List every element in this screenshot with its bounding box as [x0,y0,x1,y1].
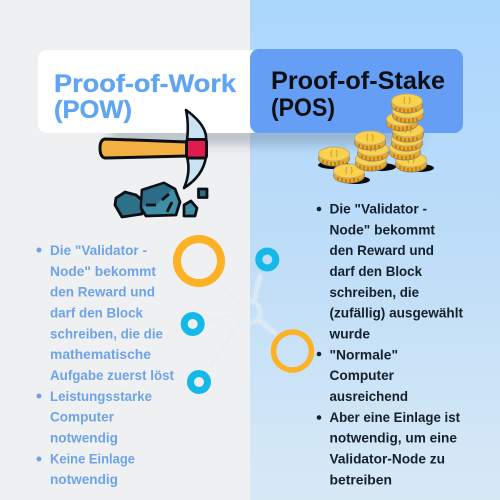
text block: Proof-of-Stake bullets: darf den Block [330,263,422,279]
title: Proof-of-Stake: Proof-of-Stake [271,67,445,95]
text block: Proof-of-Work bullets: den Reward und [50,284,155,300]
text block: Proof-of-Work bullets: Leistungsstarke [50,388,152,404]
text block: Proof-of-Stake bullets: schreiben, die [330,284,419,300]
text block: Proof-of-Stake bullets: notwendig, um eine [330,430,457,446]
icon: rocks [115,183,207,217]
text block: Proof-of-Stake bullets: wurde [329,326,370,342]
decorative ring: orange left [177,239,221,283]
decorative ring: cyan lower left [190,374,208,390]
panel: Proof-of-Work header [38,50,260,133]
text block: Proof-of-Stake bullets: (zufällig) ausgewählt [330,305,463,321]
decorative ring: orange right [274,332,312,370]
text block: Proof-of-Stake bullets [317,200,463,487]
text block: Proof-of-Stake bullets: Computer [330,367,395,383]
text block: Proof-of-Stake bullets: Die "Validator - [330,200,427,216]
text block: Proof-of-Work bullets: Aufgabe zuerst löst [50,367,174,383]
text block: Proof-of-Work bullets: Die "Validator - [50,242,147,258]
icon: gold coins [318,94,434,184]
text block: Proof-of-Work bullets: darf den Block [50,304,143,320]
header shadow [110,128,420,144]
text block: Proof-of-Work bullets: notwendig [50,430,118,446]
text block: Proof-of-Work bullets: schreiben, die die [50,325,163,341]
title: POS: (POS) [271,94,335,122]
text block: Proof-of-Work bullets: Keine Einlage [50,450,135,466]
network connector lines [205,276,275,370]
text block: Proof-of-Stake bullets: Aber eine Einlage ist [330,409,460,425]
text block: Proof-of-Stake bullets: "Normale" [330,346,398,362]
coin shadows [318,161,434,184]
text block: Proof-of-Stake bullets: Node" bekommt [330,221,435,237]
text block: Proof-of-Stake bullets: den Reward und [330,242,434,258]
text block: Proof-of-Stake bullets: Validator-Node zu [330,450,445,466]
text block: Proof-of-Work bullets: Node" bekommt [50,263,156,279]
text block: Proof-of-Work bullets: notwendig [50,471,118,487]
title: Proof-of-Work: Proof-of-Work [54,70,236,98]
panel: Proof-of-Stake header [250,49,463,133]
text block: Proof-of-Stake bullets: betreiben [330,471,392,487]
title: POW: (POW) [54,96,132,124]
text block: Proof-of-Work bullets: mathematische [50,346,151,362]
decorative ring: cyan upper left [184,316,201,332]
icon: pickaxe [100,110,206,188]
text block: Proof-of-Stake bullets: ausreichend [330,388,408,404]
decorative ring: cyan right [259,251,276,268]
text block: Proof-of-Work bullets: Computer [50,409,115,425]
background: left panel [0,0,250,500]
text block: Proof-of-Work bullets [36,242,174,487]
background: right panel [250,0,500,500]
